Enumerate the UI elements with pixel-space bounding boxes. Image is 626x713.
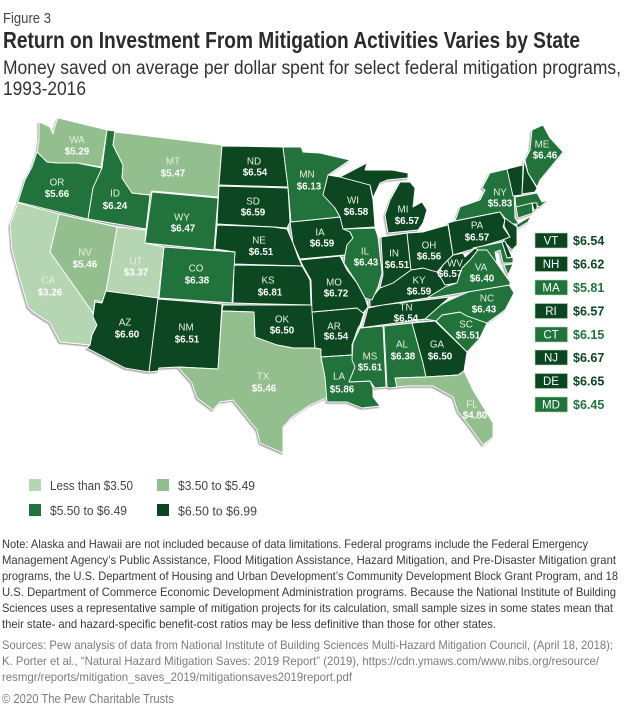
colour legend <box>29 479 257 518</box>
key row: VT <box>535 233 604 248</box>
state labels: NY <box>493 188 507 198</box>
state labels: $6.24 <box>103 201 128 212</box>
state labels: $6.50 <box>428 352 453 362</box>
key row: DE: $6.65 <box>573 374 604 388</box>
key row: NH <box>535 256 604 272</box>
key row: VT: $6.54 <box>573 234 604 248</box>
state labels: MN <box>299 170 315 180</box>
state labels: OH <box>422 240 436 252</box>
key row: NJ: NJ <box>544 352 558 364</box>
state labels: $6.43 <box>354 258 379 268</box>
state shapes <box>10 118 563 453</box>
subtitle <box>3 58 621 100</box>
key row: RI: RI <box>545 306 557 318</box>
key row: NH: NH <box>543 259 559 271</box>
key row: MA <box>535 280 604 295</box>
state labels: $6.51 <box>175 334 200 346</box>
state labels: LA <box>333 372 345 382</box>
state labels: $3.26 <box>38 288 63 298</box>
state labels: $6.57 <box>395 216 420 227</box>
state labels: $6.56 <box>417 252 442 262</box>
state labels: TN <box>399 302 413 314</box>
state labels: NC <box>480 294 494 304</box>
state labels: $6.51 <box>385 260 410 271</box>
state labels: GA <box>430 340 445 350</box>
key row: DE <box>535 374 604 388</box>
state labels: $5.29 <box>65 146 90 158</box>
state labels: $6.81 <box>258 288 283 298</box>
state labels: TX <box>257 372 270 382</box>
state labels: FL <box>466 400 478 410</box>
state labels: $6.54 <box>324 332 349 342</box>
key row: MA: $5.81 <box>573 281 604 295</box>
state labels: IN <box>389 248 399 260</box>
key row: RI <box>535 304 604 318</box>
key row: NJ <box>535 350 604 365</box>
state labels: $6.13 <box>297 182 322 192</box>
state labels: $6.50 <box>270 326 295 336</box>
key row: VT: VT <box>544 236 558 248</box>
state labels: IL <box>361 246 370 258</box>
state labels: $6.54 <box>243 168 268 178</box>
state labels: CO <box>189 264 204 274</box>
state labels: OR <box>50 178 64 188</box>
state labels: $6.46 <box>533 150 558 162</box>
state labels: $6.43 <box>472 304 497 316</box>
state labels: $6.54 <box>394 314 419 324</box>
state labels: $5.83 <box>488 198 513 210</box>
state labels: SC <box>459 320 473 330</box>
map of the United States <box>10 118 563 453</box>
key row: MD: MD <box>542 400 560 412</box>
state labels: ME <box>535 140 550 150</box>
sources text <box>2 638 613 684</box>
key row: MA: MA <box>542 282 560 294</box>
northeast state key <box>535 233 604 412</box>
state labels: KY <box>412 276 426 286</box>
state labels: MO <box>326 278 342 288</box>
state labels: $6.60 <box>115 330 140 340</box>
state labels: $5.47 <box>161 168 186 180</box>
state labels: $6.59 <box>241 208 266 218</box>
key row: MD <box>535 397 604 412</box>
state labels: $6.38 <box>185 276 210 286</box>
copyright: © 2020 The Pew Charitable Trusts <box>2 691 174 706</box>
state labels: AR <box>327 322 341 332</box>
state labels: AZ <box>119 318 131 328</box>
sources text: K. Porter et al., “Natural Hazard Mitigation Saves: 2019 Report” (2019), https://cdn.ymaws.com/www.nibs.org/resource/ <box>2 654 600 668</box>
sources text: resmgr/reports/mitigation_saves_2019/mitigationsaves2019report.pdf <box>2 670 353 684</box>
state labels: OK <box>275 314 290 326</box>
state labels: $6.59 <box>310 238 335 250</box>
state labels: ID <box>110 188 120 200</box>
state labels: $5.46 <box>252 384 277 394</box>
key row: CT <box>535 327 604 342</box>
note text: their state- and hazard-specific benefit-cost ratios may be less definitive than those for other states. <box>2 617 496 631</box>
state labels: $6.58 <box>344 207 369 218</box>
state labels: WV <box>447 258 463 270</box>
state labels: KS <box>261 276 275 286</box>
state labels: $5.51 <box>456 330 481 342</box>
state labels: UT <box>129 256 143 268</box>
state labels: MT <box>166 156 180 168</box>
state labels: PA <box>471 220 484 232</box>
key row: CT: $6.15 <box>573 328 604 342</box>
state labels: VA <box>475 262 488 274</box>
colour legend: $6.50 to $6.99 <box>178 504 257 518</box>
state labels: $6.51 <box>249 247 274 258</box>
state labels: SD <box>246 196 260 208</box>
subtitle: 1993-2016 <box>3 79 86 100</box>
state labels: NV <box>78 248 92 258</box>
key row: CT: CT <box>543 330 559 342</box>
state labels: $6.57 <box>465 232 490 244</box>
colour legend: $3.50 to $5.49 <box>178 479 255 493</box>
state labels: $3.37 <box>124 268 149 278</box>
state labels: IA <box>315 228 325 238</box>
state labels: NM <box>178 322 194 334</box>
state labels: $5.66 <box>45 189 70 200</box>
state labels: WI <box>347 196 359 206</box>
note text: Note: Alaska and Hawaii are not included because of data limitations. Federal programs include the Federal Emergency <box>2 537 588 551</box>
key row: DE: DE <box>543 376 559 388</box>
state labels <box>38 135 558 422</box>
state labels: $5.61 <box>358 362 383 374</box>
state labels: $6.40 <box>470 274 495 284</box>
state labels: $4.80 <box>463 410 488 422</box>
key row: NJ: $6.67 <box>573 351 604 365</box>
key row: RI: $6.57 <box>573 304 604 318</box>
state labels: WY <box>174 212 190 224</box>
state labels: $5.46 <box>73 260 98 270</box>
state labels: MS <box>363 352 378 362</box>
colour legend: Less than $3.50 <box>50 479 133 493</box>
state labels: $6.47 <box>171 224 196 234</box>
state labels: MI <box>398 204 408 216</box>
key row: MD: $6.45 <box>573 398 604 412</box>
state labels: ND <box>247 156 261 168</box>
state labels: AL <box>396 340 409 350</box>
figure label: Figure 3 <box>3 11 51 27</box>
state labels: CA <box>41 276 55 286</box>
state labels: $6.72 <box>324 288 349 300</box>
state labels: NE <box>252 236 266 246</box>
colour legend: $5.50 to $6.49 <box>50 504 127 518</box>
note text <box>2 537 618 631</box>
state labels: $6.57 <box>438 269 463 280</box>
key row: NH: $6.62 <box>573 258 604 272</box>
state labels: $6.59 <box>407 286 432 298</box>
state labels: WA <box>69 135 85 146</box>
state labels: $6.38 <box>391 352 416 362</box>
state labels: $5.86 <box>330 384 355 396</box>
